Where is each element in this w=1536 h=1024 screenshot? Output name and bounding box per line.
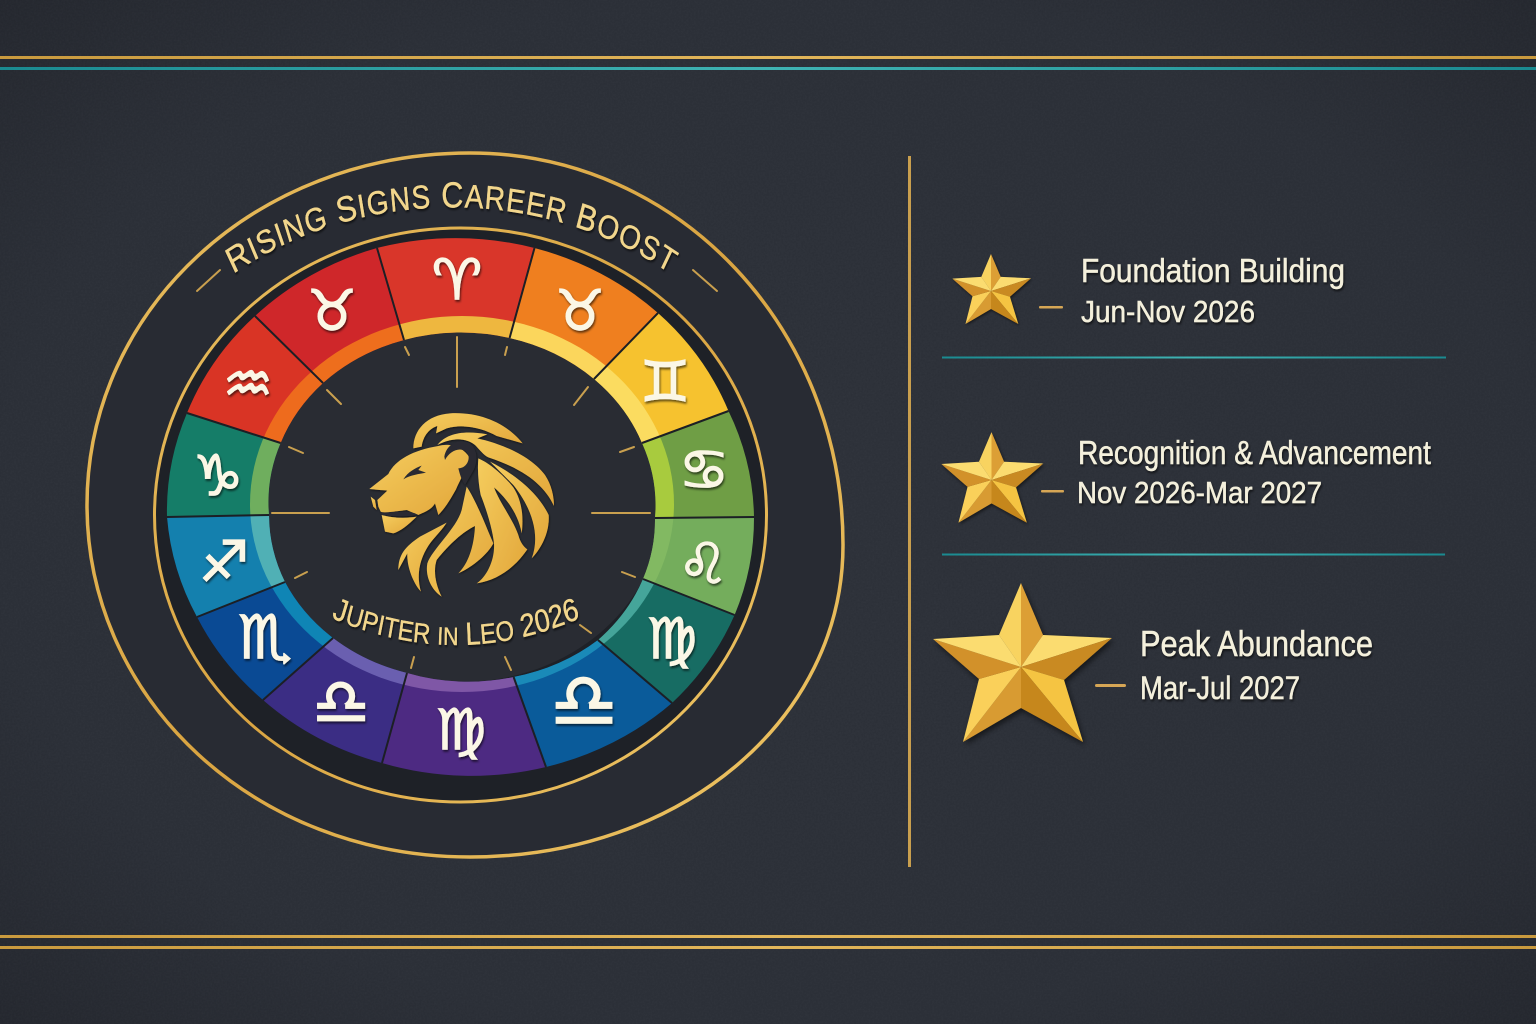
panel: milestone 3 [933, 583, 1373, 742]
heading: foundation building: Foundation Building [1081, 252, 1345, 289]
inner gold ring and dark disc [154, 228, 766, 802]
zodiac glyphs: ♑︎ [193, 444, 243, 509]
dates: jun-nov 2026: Jun-Nov 2026 [1081, 294, 1255, 329]
connector dash 2 [1041, 490, 1064, 492]
zodiac glyphs: ♎︎ [312, 666, 370, 740]
segment: taurus left [255, 248, 404, 383]
teal divider 1 [942, 356, 1446, 358]
connector dash 1 [1039, 306, 1063, 308]
zodiac glyphs: ♐︎ [199, 530, 249, 595]
zodiac glyphs: ♒︎ [223, 352, 273, 417]
vertical gold divider [908, 156, 911, 867]
icon: lion head [369, 413, 554, 597]
label: jupiter in leo 2026: JUPITER IN LEO 2026 [333, 598, 579, 648]
zodiac glyphs: ♍︎ [647, 607, 697, 672]
zodiac glyphs: ♍︎ [436, 698, 486, 763]
top gold rule [0, 56, 1536, 59]
segment: aquarius [187, 316, 323, 443]
segment: virgo bottom [382, 673, 546, 776]
panel: milestone 2 [941, 432, 1431, 523]
icon: star 1 [952, 254, 1031, 324]
title flourish dashes [197, 270, 717, 291]
bottom gold rules [0, 935, 1536, 949]
panel: zodiac wheel [85, 151, 845, 859]
center hole [262, 330, 662, 682]
segment: taurus right [510, 248, 658, 379]
heading: recognition and advancement: Recognition & Advancement [1078, 434, 1431, 471]
zodiac glyphs: ♌︎ [678, 532, 728, 597]
top teal rule [0, 67, 1536, 70]
segment: cancer [642, 411, 754, 518]
zodiac glyphs: ♋︎ [679, 438, 729, 503]
segment: libra left [263, 638, 407, 763]
segment: gemini [594, 313, 728, 443]
dates: mar-jul 2027: Mar-Jul 2027 [1140, 670, 1300, 706]
segment: sagittarius [167, 515, 285, 617]
title: rising signs career boost: RISING SIGNS CAREER BOOST [225, 182, 680, 275]
zodiac glyphs [193, 248, 729, 763]
gold tick marks [272, 337, 650, 670]
dates: nov 2026-mar 2027: Nov 2026-Mar 2027 [1077, 475, 1322, 510]
panel: milestone 1 [952, 252, 1345, 329]
segment: capricorn [167, 413, 281, 517]
zodiac glyphs: ♎︎ [550, 656, 618, 745]
zodiac glyphs: ♉︎ [307, 279, 357, 344]
segment separators [167, 248, 754, 767]
segment: leo [643, 517, 754, 615]
icon: star 3 [933, 583, 1112, 742]
outer gold ring [87, 153, 843, 857]
segment: aries top [377, 238, 534, 340]
segment: libra right [514, 640, 672, 767]
segment: virgo right [598, 579, 735, 703]
lion eye and ear cut-outs [381, 441, 476, 516]
zodiac glyphs: ♏︎ [238, 603, 292, 673]
heading: peak abundance: Peak Abundance [1140, 623, 1373, 664]
segment: scorpio [197, 582, 333, 700]
icon: star 2 [941, 432, 1043, 523]
teal divider 2 [942, 554, 1445, 556]
zodiac glyphs: ♈︎ [432, 248, 482, 313]
zodiac glyphs: ♉︎ [555, 279, 605, 344]
zodiac glyphs: ♊︎ [640, 350, 690, 415]
connector dash 3 [1095, 684, 1126, 687]
